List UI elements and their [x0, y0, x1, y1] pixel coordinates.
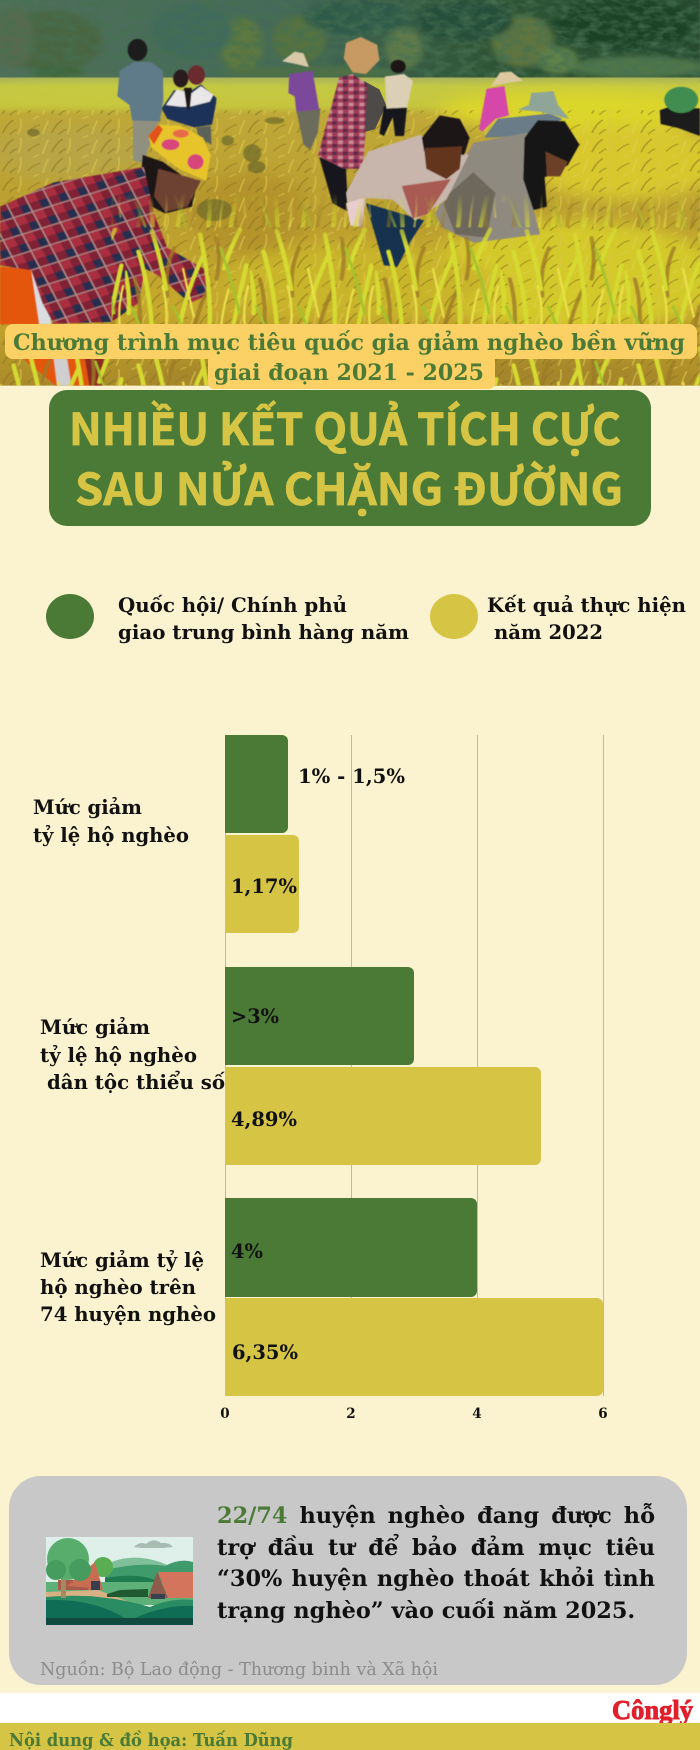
person: red plaid and head scarf	[318, 37, 379, 212]
callout paragraph: trợ đầu tư để bảo đảm mục tiêu	[217, 1535, 655, 1561]
subtitle text: giai đoạn 2021 - 2025	[214, 360, 484, 386]
bar: 1% - 1.5% target	[225, 735, 288, 833]
bar: 4% target	[225, 1198, 477, 1297]
bar: 4.89% result	[225, 1067, 541, 1165]
person: purple shirt with hat	[282, 52, 321, 150]
rice blades	[0, 193, 700, 386]
logo band	[0, 1693, 700, 1723]
logo: Công lý: Cônglý	[612, 1695, 693, 1725]
category label: Mức giảm tỷ lệ	[40, 1248, 204, 1272]
subtitle text	[13, 330, 685, 386]
category label: Mức giảm	[40, 1015, 150, 1039]
bar chart	[33, 735, 608, 1422]
person: man in denim	[117, 39, 163, 164]
x axis labels: 6	[598, 1406, 608, 1422]
legend	[46, 593, 686, 644]
title panel	[49, 390, 651, 526]
legend text: assigned target: giao trung bình hàng năm	[118, 620, 409, 644]
right house	[148, 1572, 193, 1599]
person: grey hat bending	[484, 91, 569, 138]
callout panel background	[9, 1476, 687, 1685]
category label	[40, 1248, 216, 1326]
value label: 4,89%	[231, 1108, 297, 1131]
banner pill line 2	[208, 355, 495, 389]
category label: tỷ lệ hộ nghèo	[33, 823, 189, 847]
person: pink shirt with hat	[479, 72, 523, 132]
value label: 1,17%	[231, 875, 297, 898]
person: green hat	[660, 87, 700, 136]
title text: SAU NỬA CHẶNG ĐƯỜNG	[75, 454, 623, 518]
value label: 4%	[231, 1240, 263, 1263]
left house	[58, 1562, 103, 1590]
person: beige shirt	[379, 60, 413, 136]
category label: 74 huyện nghèo	[40, 1303, 216, 1326]
callout paragraph: trạng nghèo” vào cuối năm 2025.	[217, 1598, 635, 1624]
x axis labels: 0	[220, 1406, 230, 1422]
source note: Nguồn: Bộ Lao động - Thương binh và Xã hội	[40, 1659, 438, 1680]
value label: >3%	[231, 1005, 279, 1028]
subtitle text: Chương trình mục tiêu quốc gia giảm nghèo bền vững	[13, 330, 685, 356]
icon: clumps	[27, 117, 284, 221]
legend text: assigned target: Quốc hội/ Chính phủ	[118, 593, 347, 617]
x axis labels: 4	[472, 1406, 482, 1422]
x axis labels	[220, 1406, 608, 1422]
legend text: 2022 result	[487, 593, 686, 644]
callout paragraph: “30% huyện nghèo thoát khỏi tình	[217, 1566, 655, 1592]
callout paragraph: 22/74 huyện nghèo đang được hỗ	[217, 1503, 655, 1529]
person: foreground woman in plaid shirt	[0, 125, 211, 386]
title text: NHIỀU KẾT QUẢ TÍCH CỰC	[69, 394, 621, 458]
credit bar	[0, 1723, 700, 1750]
subtitle banner	[5, 324, 697, 389]
callout paragraph	[217, 1503, 655, 1624]
category label: hộ nghèo trên	[40, 1276, 196, 1299]
person: woman in grey stripes	[435, 121, 579, 243]
photo: rice harvest	[0, 0, 700, 393]
bar: 1.17% result	[225, 835, 299, 933]
category label	[40, 1015, 225, 1094]
legend marker: green	[46, 594, 94, 639]
group: ethnic minority reduction	[40, 967, 541, 1165]
banner pill line 1	[5, 324, 697, 359]
group: poverty rate reduction	[33, 735, 405, 933]
category label: dân tộc thiểu số	[47, 1069, 225, 1094]
category label: tỷ lệ hộ nghèo	[40, 1043, 197, 1067]
legend marker: yellow	[430, 594, 478, 639]
person: woman in grey-pink blouse	[346, 115, 470, 267]
category label	[33, 795, 189, 847]
icon: village landscape	[46, 1537, 193, 1625]
title text	[69, 394, 623, 518]
value label: 6,35%	[232, 1341, 298, 1364]
legend text: 2022 result: năm 2022	[494, 620, 603, 644]
value label: 1% - 1,5%	[298, 765, 405, 788]
bar: 6.35% result	[225, 1298, 603, 1396]
x axis labels: 2	[346, 1406, 356, 1422]
bar: >3% target	[225, 967, 414, 1065]
category label: Mức giảm	[33, 795, 142, 819]
legend text: 2022 result: Kết quả thực hiện	[487, 593, 686, 617]
tree	[46, 1538, 91, 1598]
legend text: assigned target	[118, 593, 409, 644]
group: 74 poor districts reduction	[40, 1198, 603, 1396]
person: two children	[162, 65, 217, 145]
person: dark jacket behind	[362, 81, 386, 133]
